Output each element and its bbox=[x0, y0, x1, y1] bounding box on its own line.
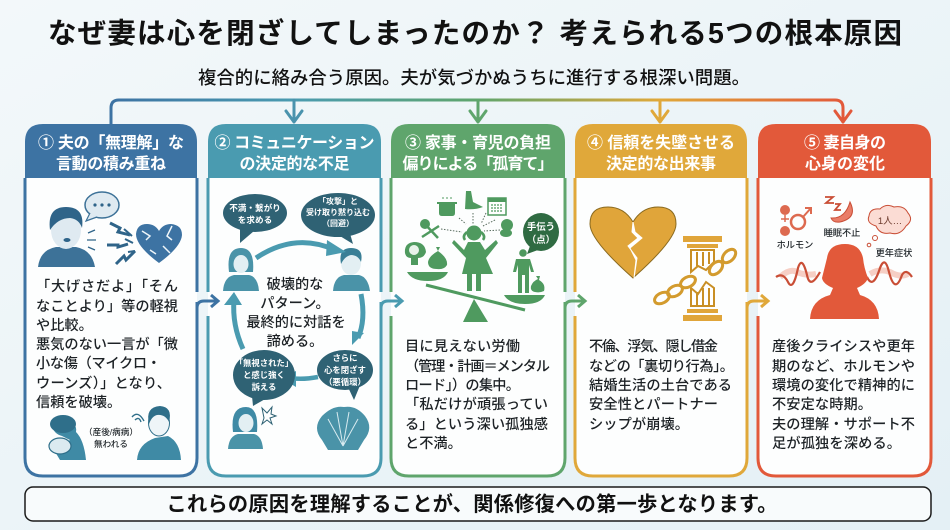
speech bubble: felt ignored: 「無視された」 bbox=[235, 358, 293, 368]
panel: cause 4 bbox=[575, 124, 747, 476]
text block: cause 5: 期のなど、ホルモンや bbox=[772, 359, 915, 375]
text block: cause 3: 目に見えない労働 bbox=[405, 339, 520, 355]
text block: cause 5: 不安定な時期。 bbox=[772, 397, 872, 413]
text block: cause 4: 不倫、浮気、隠し借金 bbox=[589, 339, 718, 355]
diagram: destructive communication cycle bbox=[223, 193, 375, 450]
icon: mood waves bbox=[776, 262, 912, 285]
speech bubble: withdrawal: 受け取り黙り込む bbox=[306, 207, 370, 217]
speech bubble: helping a little bbox=[523, 213, 559, 254]
icon: angry wife bbox=[228, 407, 276, 449]
icon: husband bbox=[333, 248, 370, 291]
text block: cause 4: などの「裏切り行為」。 bbox=[589, 358, 734, 375]
icon: hormones, sleep and menopause symbols: 睡眠不止 bbox=[824, 227, 860, 238]
panel: cause 5 bbox=[758, 124, 931, 476]
text block: cause 3: と不満。 bbox=[405, 436, 462, 452]
icon: wife bbox=[223, 248, 259, 291]
speech bubble: seeking connection bbox=[223, 194, 287, 243]
arrow: cause 2 to cause 3 bbox=[381, 295, 402, 320]
subtitle: 複合的に絡み合う原因。夫が気づかぬうちに進行する根深い問題。 bbox=[198, 67, 750, 88]
connector: top flow line with arrows bbox=[111, 100, 851, 124]
heading: cause 3: 偏りによる「孤育て」 bbox=[402, 154, 554, 173]
arrow: cause 3 to cause 4 bbox=[565, 295, 585, 320]
text block: cause 1: 小な傷（マイクロ・ bbox=[36, 355, 161, 372]
text block: cause 1: ウーンズ）」となり、 bbox=[36, 375, 171, 392]
icon: unbalanced seesaw of household load bbox=[405, 191, 545, 322]
speech bubble: worsening cycle: （悪循環） bbox=[324, 377, 366, 387]
heading: cause 3: ③ 家事・育児の負担 bbox=[405, 133, 551, 152]
text block: cause 1: なことより」等の軽視 bbox=[36, 298, 178, 315]
panel: cause 3 bbox=[391, 124, 565, 476]
icon: wife silhouette bbox=[810, 244, 879, 319]
icon: closed shell bbox=[317, 407, 369, 450]
text block: cause 4: シップが崩壊。 bbox=[589, 416, 689, 433]
icon: hormones, sleep and menopause symbols bbox=[777, 197, 912, 258]
heading: cause 2: ② コミュニケーション bbox=[214, 134, 374, 152]
panel: cause 2 bbox=[208, 124, 381, 476]
arrow: withdrawal to wife complaint bbox=[281, 371, 318, 387]
footer callout: これらの原因を理解することが、関係修復への第一歩となります。 bbox=[166, 492, 778, 516]
icon: mother with baby and dismissed husband: 無われる bbox=[94, 438, 128, 449]
heading: cause 1: 言動の積み重ね bbox=[56, 155, 166, 173]
speech bubble: helping a little: （点） bbox=[527, 234, 555, 245]
heading: cause 5: ⑤ 妻自身の bbox=[804, 133, 886, 152]
icon: broken heart bbox=[590, 207, 676, 278]
text block: cycle centre: 最終的に対話を bbox=[246, 315, 346, 331]
speech bubble: worsening cycle: 心を閉ざす bbox=[324, 365, 366, 375]
arrow: cause 1 to cause 2 bbox=[197, 295, 218, 320]
speech bubble: worsening cycle: さらに bbox=[332, 353, 358, 363]
speech bubble: withdrawal: （回避） bbox=[322, 218, 354, 228]
speech bubble: felt ignored bbox=[233, 350, 295, 406]
text block: cycle centre: パターン。 bbox=[260, 296, 330, 312]
footer callout bbox=[25, 487, 931, 521]
speech bubble: withdrawal: 「攻撃」と bbox=[318, 196, 358, 206]
heading: cause 2: の決定的な不足 bbox=[240, 155, 350, 173]
icon: mother with baby and dismissed husband bbox=[49, 406, 181, 460]
speech bubble: seeking connection: 不満・繋がり bbox=[229, 202, 281, 213]
heading: cause 1: ① 夫の「無理解」な bbox=[38, 133, 184, 152]
text block: cycle centre: 破壊的な bbox=[267, 276, 323, 293]
arrow: complaint back to wife bbox=[224, 292, 243, 349]
heading: cause 4: ④ 信頼を失墜させる bbox=[587, 133, 735, 152]
icon: hormones, sleep and menopause symbols: ホルモン bbox=[777, 240, 813, 250]
speech bubble: worsening cycle bbox=[317, 350, 373, 400]
text block: cause 3: 「私だけが頑張ってい bbox=[405, 396, 548, 413]
heading: cause 5: 心身の変化 bbox=[805, 154, 885, 173]
icon: broken pillar and chain bbox=[653, 236, 738, 321]
text block: cause 5: 夫の理解・サポート不 bbox=[772, 416, 915, 433]
title: なぜ妻は心を閉ざしてしまったのか？ 考えられる5つの根本原因 bbox=[48, 17, 902, 50]
text block: cause 1: や比較。 bbox=[36, 318, 93, 334]
icon: husband speaking and cracked heart bbox=[38, 192, 182, 267]
text block: cause 5: 産後クライシスや更年 bbox=[772, 338, 915, 355]
text block: cause 5: 足が孤独を深める。 bbox=[772, 435, 901, 452]
speech bubble: seeking connection: を求める bbox=[238, 214, 272, 225]
arrow: cause 4 to cause 5 bbox=[747, 295, 768, 320]
text block: cause 4: 結婚生活の土台である bbox=[589, 377, 732, 394]
text block: cause 1: 信頼を破壊。 bbox=[36, 394, 121, 411]
heading: cause 4: 決定的な出来事 bbox=[606, 154, 716, 173]
speech bubble: felt ignored: 訴える bbox=[252, 382, 276, 392]
panel: cause 1 bbox=[25, 124, 197, 476]
speech bubble: helping a little: 手伝う bbox=[527, 221, 555, 232]
text block: cause 4: 安全性とパートナー bbox=[589, 397, 718, 413]
text block: cause 3: （管理・計画＝メンタル bbox=[405, 358, 550, 375]
text block: cycle centre: 諦める。 bbox=[267, 334, 323, 350]
text block: cause 1: 「大げさだよ」「そん bbox=[36, 279, 178, 295]
icon: mother with baby and dismissed husband: （産後/病病） bbox=[84, 426, 138, 437]
text block: cause 1: 悪気のない一言が「微 bbox=[36, 336, 178, 353]
speech bubble: felt ignored: と感じ強く bbox=[243, 370, 285, 380]
icon: hormones, sleep and menopause symbols: 更年症状 bbox=[876, 247, 912, 258]
text block: cause 3: ロード」）の集中。 bbox=[405, 378, 520, 394]
text block: cause 3: る」という深い孤独感 bbox=[405, 416, 548, 433]
text block: cause 5: 環境の変化で精神的に bbox=[772, 378, 915, 394]
speech bubble: withdrawal bbox=[301, 193, 375, 244]
icon: hormones, sleep and menopause symbols: 1人… bbox=[878, 216, 902, 227]
arrow: wife to husband bbox=[256, 240, 346, 258]
arrow: husband to withdrawal bbox=[352, 294, 364, 345]
